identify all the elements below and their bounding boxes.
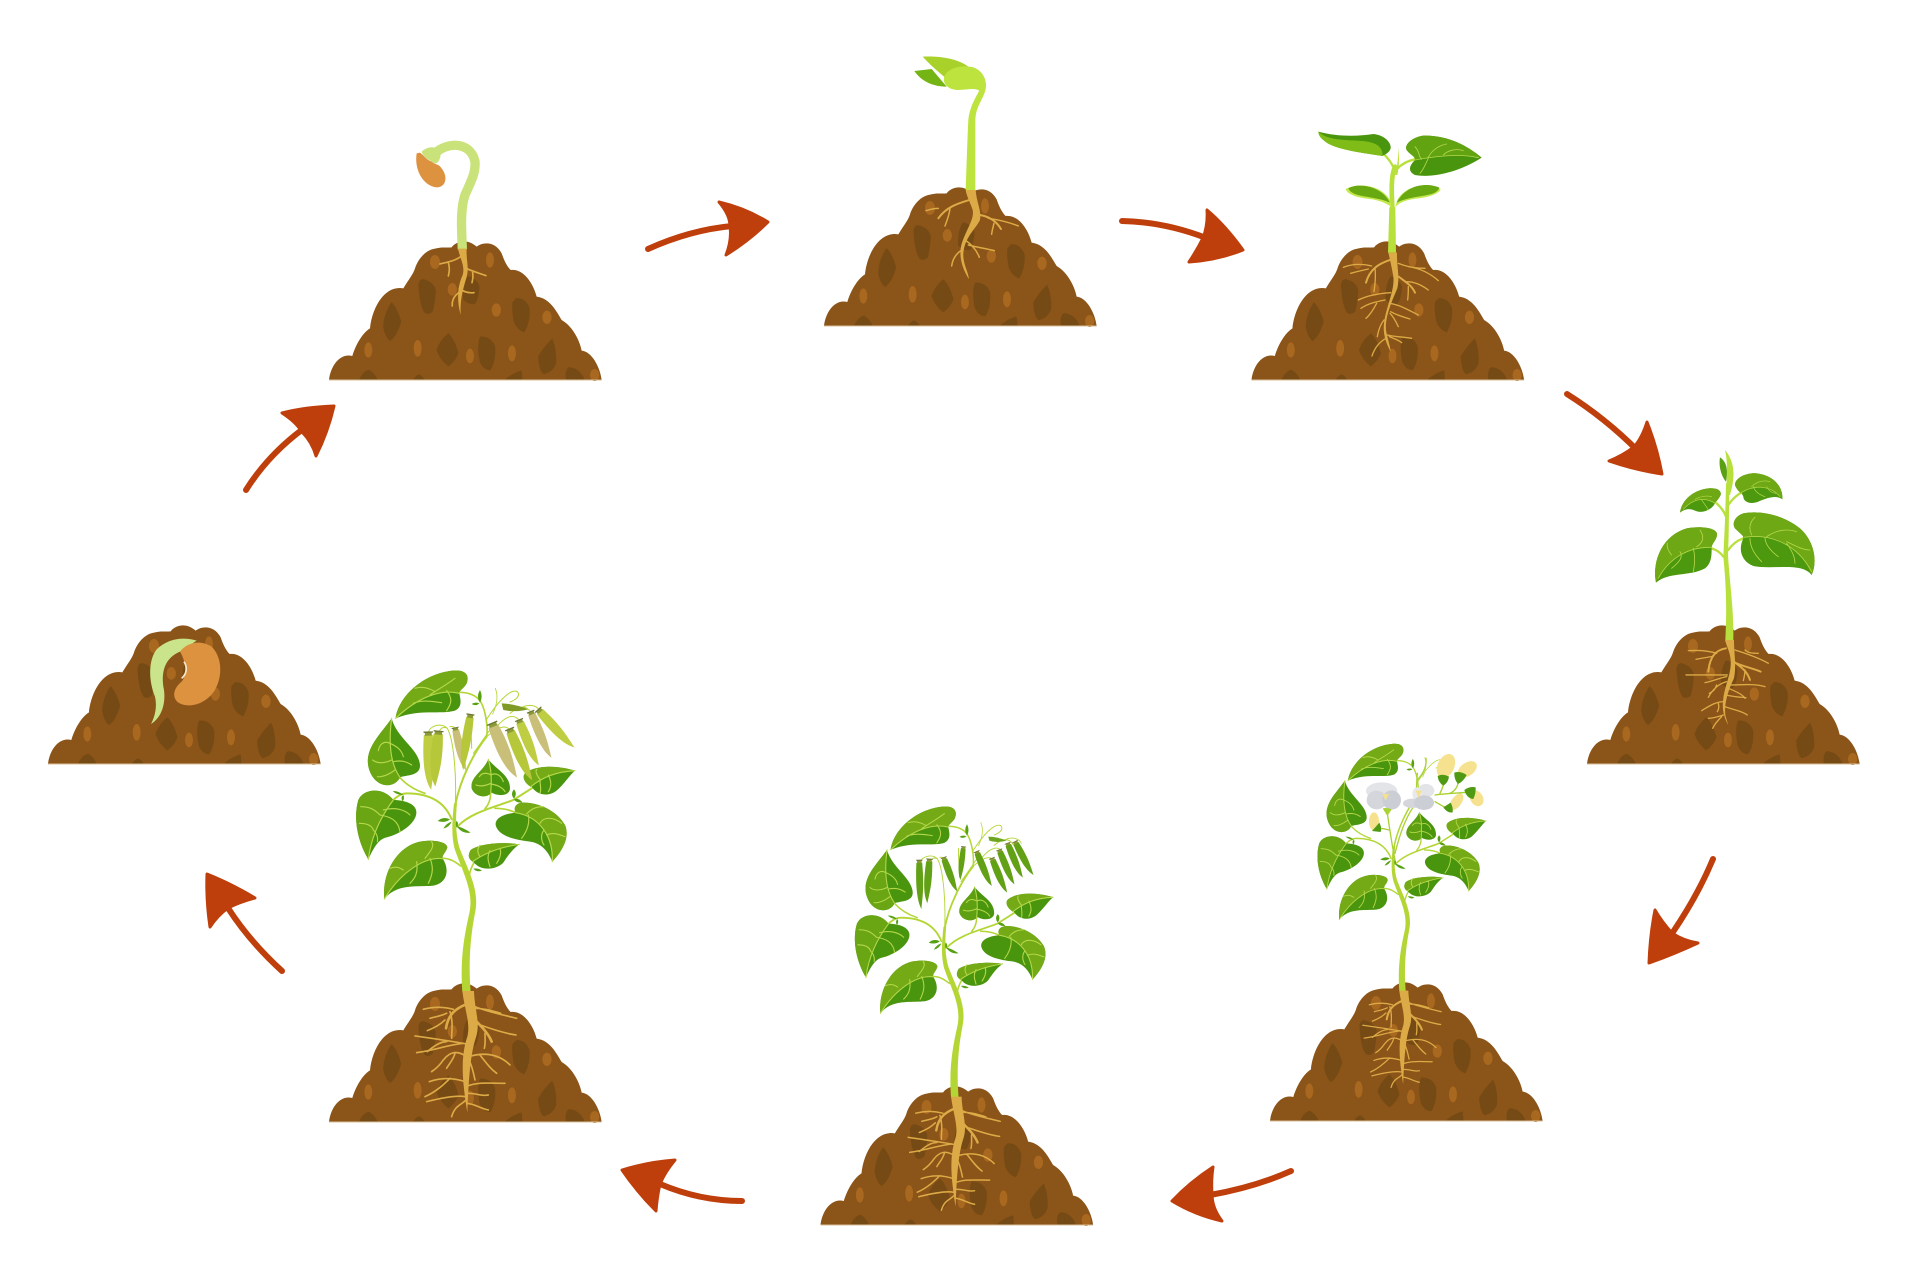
flowers and buds [1366, 751, 1486, 860]
top left leaf [1318, 132, 1391, 156]
soil mound [1252, 241, 1524, 381]
sprout and seed [416, 145, 486, 315]
arrow: stage 8 to 1 [207, 874, 282, 971]
leaf: top left [1680, 488, 1721, 513]
stage 2: hooked sprout [329, 145, 602, 381]
soil mound [820, 1086, 1093, 1226]
soil mound [329, 983, 602, 1123]
ripening pods [423, 703, 577, 790]
roots [1723, 640, 1735, 725]
seedling [1318, 132, 1482, 356]
young plant [1655, 450, 1815, 728]
stage 1: germinating seed in soil [48, 625, 321, 765]
seed with emerging shoot [150, 639, 220, 724]
roots [1384, 253, 1398, 352]
stage 4: seedling with first leaves [1252, 132, 1524, 381]
arrow: stage 1 to 2 [246, 406, 334, 490]
cotyledons [1346, 186, 1392, 207]
plant body [356, 670, 575, 1117]
arrow: stage 7 to 8 [622, 1160, 742, 1211]
plant body [1317, 744, 1486, 1087]
soil mound [824, 187, 1097, 327]
stage 8: mature plant with ripening pods [329, 670, 602, 1123]
pod stems [428, 705, 540, 803]
arrow: stage 5 to 6 [1649, 859, 1713, 963]
yellow buds [1369, 751, 1486, 830]
soil mound [48, 625, 321, 765]
leaf: big left [1655, 527, 1717, 583]
plant body [855, 806, 1053, 1210]
leaf: big right [1734, 512, 1815, 575]
arrow: stage 2 to 3 [648, 202, 768, 255]
arrow: stage 6 to 7 [1172, 1167, 1291, 1221]
stage 3: sprout with bud [824, 57, 1097, 327]
pod stems [920, 838, 1021, 927]
soil mound [1587, 625, 1860, 765]
top bud [1720, 457, 1727, 482]
leaf: top right [1735, 473, 1782, 503]
soil mound [1270, 982, 1543, 1122]
green pods [916, 837, 1036, 909]
top right leaf [1406, 136, 1482, 176]
soil mound [329, 241, 602, 381]
stage 5: young plant with four leaves [1587, 450, 1860, 765]
arrow: stage 3 to 4 [1122, 210, 1243, 262]
arrow: stage 4 to 5 [1567, 394, 1662, 474]
sprout [914, 57, 1018, 279]
white flowers [1366, 782, 1397, 800]
stage 7: plant with green pods [820, 806, 1093, 1226]
stage 6: flowering plant [1270, 744, 1543, 1122]
